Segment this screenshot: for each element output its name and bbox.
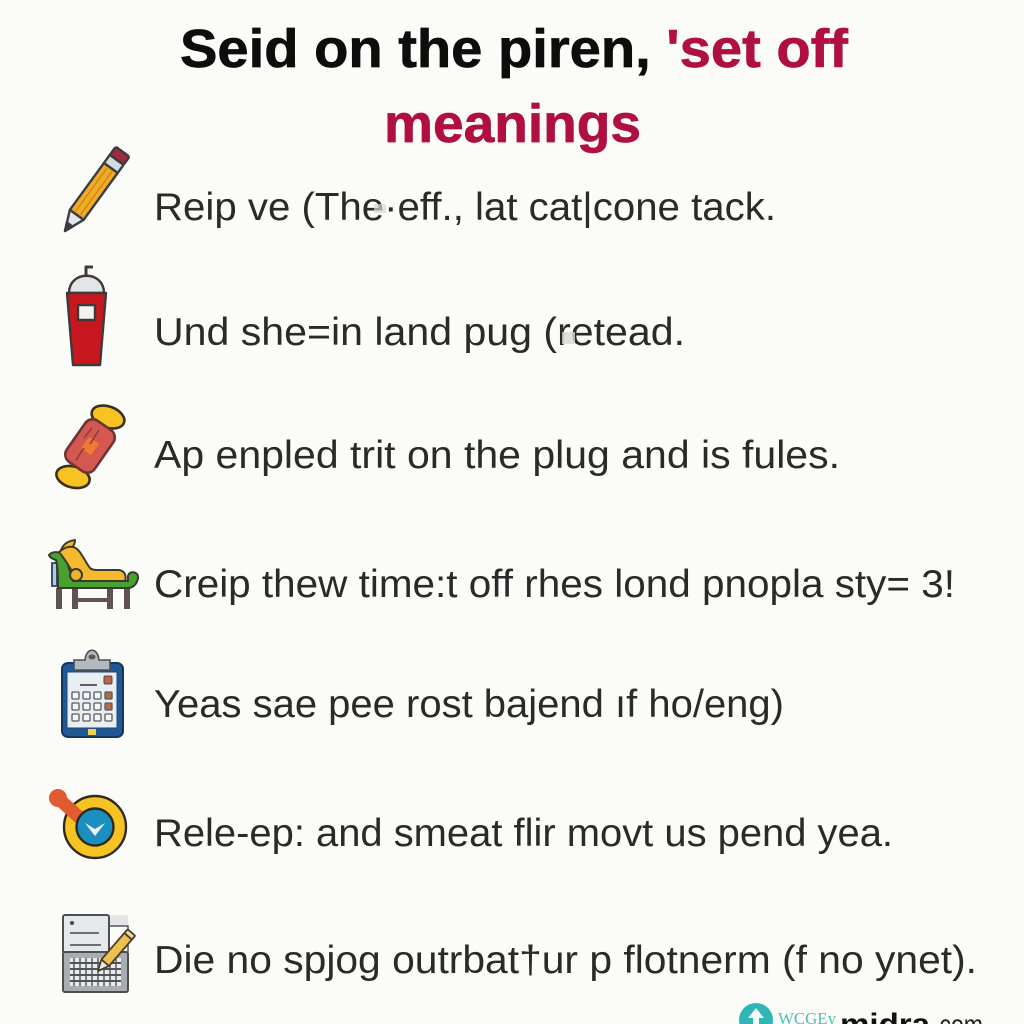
text line 6: Rele-ep: and smeat flir movt us pend yea. — [154, 812, 893, 855]
icon: candy — [54, 401, 128, 492]
icon: calendar clipboard — [62, 650, 123, 737]
text line 3: Ap enpled trit on the plug and is fules. — [154, 434, 840, 477]
icon: red cup — [67, 267, 106, 365]
icon: keyboard and pencil — [63, 915, 135, 992]
icon: target dial — [49, 789, 126, 858]
icon: chaise lounge — [49, 540, 138, 609]
icon: pencil — [58, 147, 129, 236]
list item 3 — [54, 401, 840, 492]
text line 7: Die no spjog outrbat†ur p flotnerm (f no ynet). — [154, 939, 977, 982]
title: meanings — [384, 94, 641, 154]
text line 2: Und she=in land pug (retead. — [154, 311, 685, 354]
text line 4: Creip thew time:t off rhes lond pnopla sty= 3! — [154, 563, 955, 606]
list item 5 — [62, 650, 784, 737]
watermark logo — [739, 1003, 983, 1024]
text line 5: Yeas sae pee rost bajend ıf ho/eng) — [154, 683, 784, 726]
icon: logo circle — [739, 1003, 773, 1024]
list item 7 — [63, 915, 977, 992]
list item 2 — [67, 267, 685, 365]
list item 4 — [49, 540, 955, 609]
title: Seid on the piren, 'set off — [180, 19, 849, 79]
list item 1 — [58, 147, 776, 236]
title — [180, 19, 849, 154]
text line 1: Reip ve (The·eff., lat cat|cone tack. — [154, 186, 776, 229]
list item 6 — [49, 789, 893, 858]
